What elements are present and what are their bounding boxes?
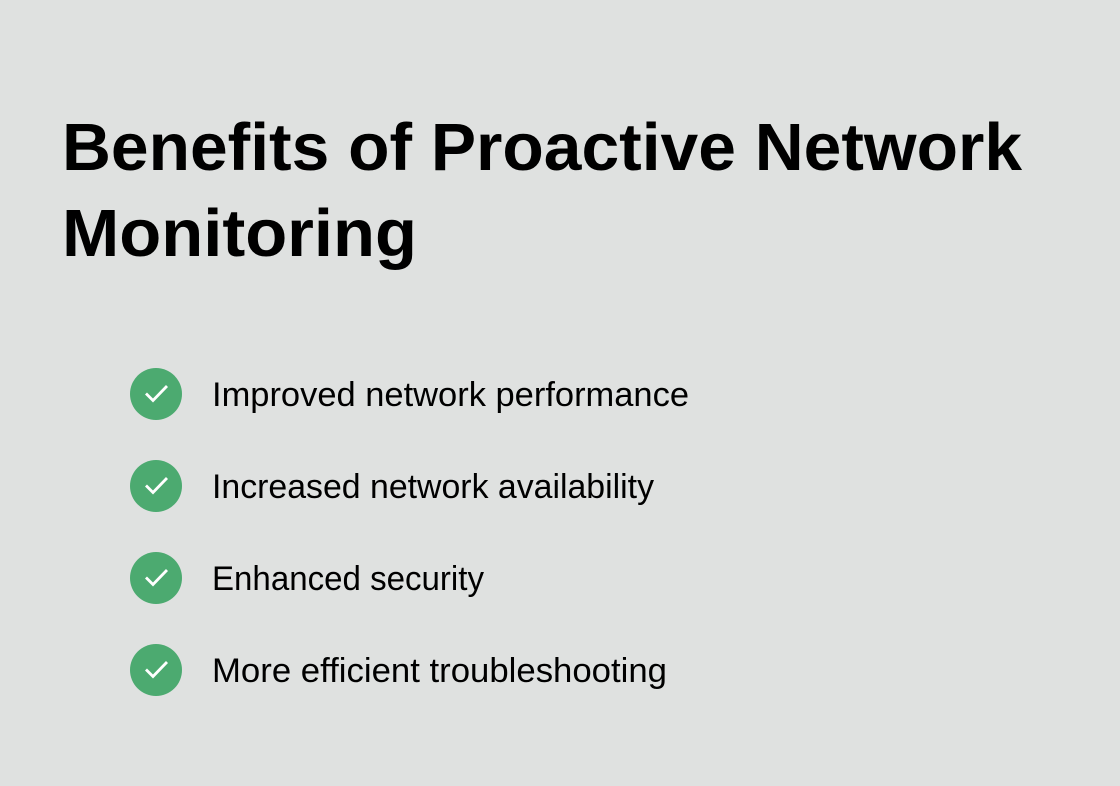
item: more efficient troubleshooting (130, 644, 667, 696)
item: improved network performance: Improved network performance (212, 376, 689, 414)
item: increased network availability: Increased network availability (212, 468, 654, 506)
benefits list (130, 368, 689, 696)
item: increased network availability (130, 460, 654, 512)
item: enhanced security: Enhanced security (212, 560, 484, 598)
title: Monitoring (62, 196, 417, 271)
item: improved network performance (130, 368, 689, 420)
title (62, 110, 1023, 271)
item: enhanced security (130, 552, 484, 604)
item: more efficient troubleshooting: More efficient troubleshooting (212, 652, 667, 690)
title: Benefits of Proactive Network (62, 110, 1023, 185)
